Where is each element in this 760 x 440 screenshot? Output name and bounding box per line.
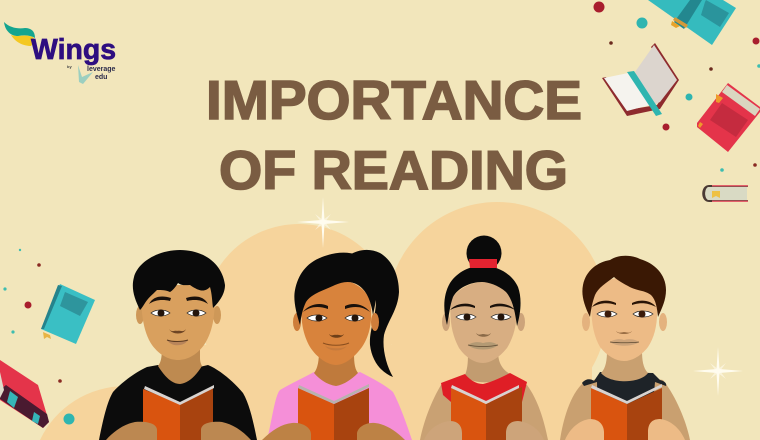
lying book bbox=[702, 185, 748, 202]
face bbox=[450, 282, 517, 363]
person 2: girl with ponytail in pink bbox=[262, 250, 412, 440]
nose bbox=[169, 329, 186, 334]
title: OF READING bbox=[219, 139, 568, 201]
sparkle right bbox=[693, 347, 743, 396]
face bbox=[591, 277, 657, 361]
person 4: boy with brown hair bbox=[560, 256, 690, 440]
open book bbox=[591, 388, 627, 440]
mouth bbox=[167, 340, 188, 345]
teal book left bbox=[41, 284, 95, 344]
red book bbox=[697, 83, 760, 152]
arms bbox=[560, 378, 690, 440]
sparkle left bbox=[297, 197, 349, 248]
brows bbox=[303, 304, 370, 312]
ears bbox=[442, 313, 450, 331]
red book left bbox=[0, 360, 49, 428]
dress bbox=[441, 373, 527, 402]
neck bbox=[158, 345, 202, 384]
open book bbox=[143, 389, 180, 440]
hair bun bbox=[466, 236, 502, 270]
neck bbox=[465, 350, 510, 382]
ears bbox=[582, 313, 590, 331]
hair bbox=[444, 266, 521, 326]
person 1: boy in black shirt bbox=[99, 250, 257, 440]
peach background blobs bbox=[40, 202, 607, 440]
confetti dots top right bbox=[594, 2, 760, 172]
nose bbox=[616, 331, 632, 334]
face bbox=[301, 280, 371, 365]
ears bbox=[136, 306, 144, 324]
person 3: girl with bun in red bbox=[420, 236, 548, 440]
logo wordmark: Wings bbox=[31, 34, 116, 66]
neck bbox=[314, 350, 358, 386]
confetti dots bottom left bbox=[3, 249, 74, 424]
nose bbox=[476, 333, 491, 337]
eyes bbox=[151, 310, 206, 316]
nose bbox=[329, 334, 344, 338]
mouth bbox=[610, 339, 639, 346]
logo byline: by bbox=[67, 64, 72, 69]
open book bbox=[298, 388, 334, 440]
hair bbox=[582, 256, 666, 317]
neck bbox=[601, 350, 648, 381]
eyes bbox=[597, 311, 653, 317]
eyes bbox=[456, 314, 511, 320]
brows bbox=[149, 296, 208, 304]
hands bbox=[565, 419, 685, 440]
leverage edu mark bbox=[78, 65, 116, 84]
brows bbox=[450, 304, 515, 310]
brows bbox=[592, 301, 656, 307]
title: IMPORTANCE bbox=[206, 69, 582, 131]
ears bbox=[293, 313, 301, 331]
face bbox=[141, 285, 215, 360]
arms bbox=[420, 385, 548, 440]
arms and hands bbox=[106, 422, 251, 440]
hair bbox=[133, 250, 225, 310]
title bbox=[206, 69, 582, 201]
arms and hands bbox=[262, 423, 405, 440]
ponytail bbox=[345, 250, 399, 377]
eyes bbox=[307, 315, 364, 321]
mouth bbox=[323, 343, 349, 345]
hair bbox=[294, 253, 376, 325]
shirt bbox=[582, 372, 666, 440]
logo: Wings by leverage edu bbox=[4, 22, 116, 84]
red hair band bbox=[469, 259, 497, 268]
logo swoosh bbox=[4, 22, 35, 46]
book: teal top right bbox=[648, 0, 736, 45]
shirt bbox=[99, 365, 257, 440]
mouth bbox=[468, 342, 498, 350]
leverage edu mark: edu bbox=[95, 74, 107, 81]
leverage edu mark: leverage bbox=[87, 66, 116, 73]
open book bbox=[602, 43, 679, 116]
hands bbox=[424, 421, 544, 440]
open book bbox=[451, 388, 486, 440]
shirt bbox=[267, 372, 412, 440]
